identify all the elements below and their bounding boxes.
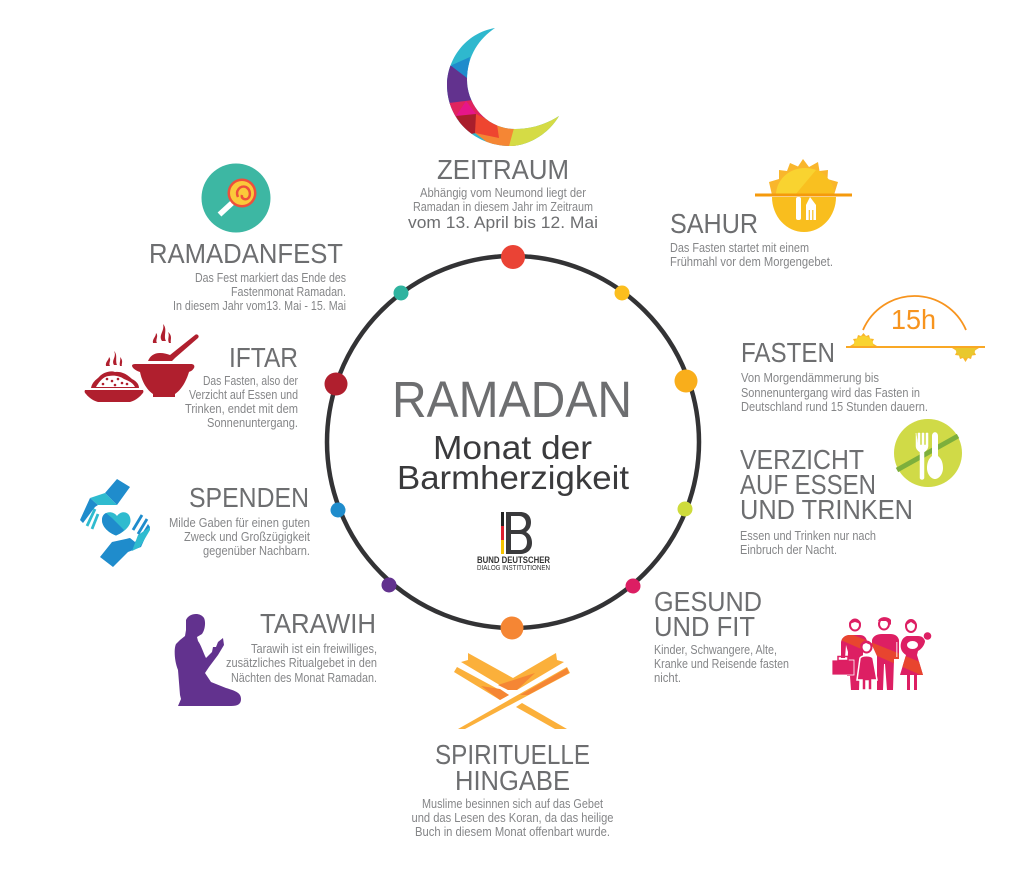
section: Gesund und fit: Kranke und Reisende fasten [654, 657, 789, 671]
section: Fasten [741, 337, 928, 414]
section: Ramadanfest [149, 238, 346, 313]
section: Sahur: SAHUR [670, 208, 758, 239]
icon: praying man [175, 614, 241, 706]
section: Verzicht auf Essen und Trinken [740, 444, 913, 557]
icon: crescent moon [447, 28, 559, 146]
icon: hands with heart [80, 479, 150, 567]
section: Spenden: Zweck und Großzügigkeit [184, 530, 310, 544]
section: Spirituelle Hingabe: SPIRITUELLE [435, 739, 590, 770]
icon: sunrise with cutlery [755, 159, 852, 232]
logo: Bund Deutscher Dialog Institutionen [477, 512, 550, 572]
section: Tarawih: zusätzliches Ritualgebet in den [226, 656, 377, 670]
icon: family [832, 617, 931, 690]
section: Spirituelle Hingabe [412, 739, 614, 839]
section: Spenden: SPENDEN [189, 482, 309, 513]
section: Spirituelle Hingabe: und das Lesen des Koran, da das heilige [412, 811, 614, 825]
section: Zeitraum: Ramadan in diesem Jahr im Zeitraum [413, 200, 593, 214]
section: Verzicht auf Essen und Trinken: Einbruch der Nacht. [740, 543, 837, 557]
logo: Bund Deutscher Dialog Institutionen: BUND DEUTSCHER [477, 555, 550, 565]
section: Ramadanfest: Fastenmonat Ramadan. [231, 285, 346, 299]
icon: 15 hours sun arc [846, 296, 985, 362]
section: Spirituelle Hingabe: HINGABE [455, 765, 570, 796]
section: Tarawih: TARAWIH [260, 608, 376, 639]
section: Iftar [185, 342, 298, 430]
section: Sahur: Das Fasten startet mit einem [670, 241, 809, 255]
section: Spenden: Milde Gaben für einen guten [169, 516, 310, 530]
central title [392, 371, 632, 496]
ring with timeline dots [324, 245, 699, 640]
section: Verzicht auf Essen und Trinken: AUF ESSEN [740, 469, 876, 500]
section: Fasten: Deutschland rund 15 Stunden dauern. [741, 400, 928, 414]
icon: 15 hours sun arc: 15h [891, 304, 936, 335]
section: Spirituelle Hingabe: Muslime besinnen sich auf das Gebet [422, 797, 603, 811]
section: Spenden [169, 482, 310, 558]
section: Sahur: Frühmahl vor dem Morgengebet. [670, 255, 833, 269]
central title: Monat der [433, 429, 592, 466]
section: Iftar: Das Fasten, also der [203, 374, 298, 388]
section: Iftar: IFTAR [229, 342, 298, 373]
logo: Bund Deutscher Dialog Institutionen: DIALOG INSTITUTIONEN [477, 563, 550, 572]
section: Gesund und fit: Kinder, Schwangere, Alte, [654, 643, 777, 657]
section: Gesund und fit: nicht. [654, 671, 681, 685]
section: Zeitraum: ZEITRAUM [437, 154, 569, 185]
section: Iftar: Verzicht auf Essen und [189, 388, 298, 402]
central title: RAMADAN [392, 371, 632, 428]
icon: open Koran on stand [454, 653, 570, 729]
section: Spirituelle Hingabe: Buch in diesem Monat offenbart wurde. [415, 825, 610, 839]
section: Ramadanfest: In diesem Jahr vom13. Mai - 15. Mai [173, 299, 346, 313]
section: Tarawih [226, 608, 377, 685]
section: Tarawih: Nächten des Monat Ramadan. [231, 671, 377, 685]
section: Spenden: gegenüber Nachbarn. [203, 544, 310, 558]
icon: lollipop [202, 164, 270, 232]
section: Gesund und fit [654, 586, 789, 685]
section: Fasten: FASTEN [741, 337, 835, 368]
section: Verzicht auf Essen und Trinken: UND TRINKEN [740, 494, 913, 525]
section: Ramadanfest: RAMADANFEST [149, 238, 343, 269]
section: Gesund und fit: GESUND [654, 586, 762, 617]
section: Fasten: Sonnenuntergang wird das Fasten in [741, 386, 920, 400]
section: Tarawih: Tarawih ist ein freiwilliges, [251, 642, 377, 656]
section: Zeitraum [408, 154, 598, 232]
section: Verzicht auf Essen und Trinken: VERZICHT [740, 444, 864, 475]
section: Zeitraum: vom 13. April bis 12. Mai [408, 213, 598, 232]
icon: Iftar bowl and plate [85, 324, 199, 402]
section: Sahur [670, 208, 833, 269]
section: Fasten: Von Morgendämmerung bis [741, 371, 879, 385]
section: Ramadanfest: Das Fest markiert das Ende des [195, 271, 346, 285]
section: Zeitraum: Abhängig vom Neumond liegt der [420, 186, 586, 200]
icon: no food circle [894, 419, 962, 487]
section: Verzicht auf Essen und Trinken: Essen und Trinken nur nach [740, 529, 876, 543]
section: Iftar: Sonnenuntergang. [207, 416, 298, 430]
central title: Barmherzigkeit [397, 459, 629, 496]
section: Gesund und fit: UND FIT [654, 611, 755, 642]
section: Iftar: Trinken, endet mit dem [185, 402, 298, 416]
